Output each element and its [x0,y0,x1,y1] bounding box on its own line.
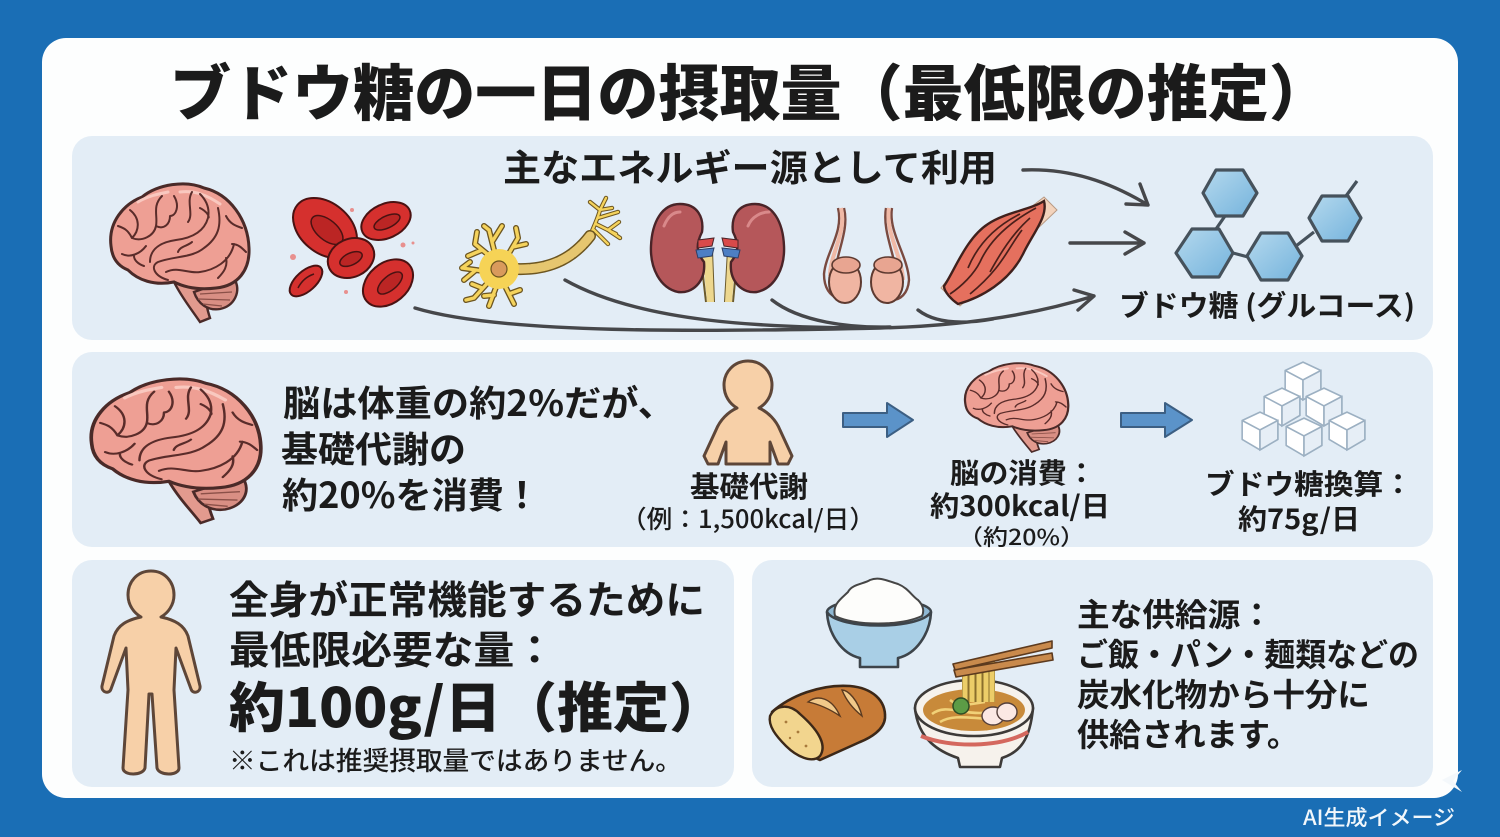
text: minimum need [229,570,725,778]
panel: food sources [752,560,1433,787]
icon: large brain [91,379,261,523]
text: brain consumption: 脳の消費： [950,452,1096,492]
arrow: label to glucose [1023,170,1148,205]
text: glucose conversion: 約75g/日 [1238,498,1360,538]
text: food sources: 主な供給源： [1077,590,1273,636]
text: minimum need: 最低限必要な量： [229,620,555,676]
text: basal metabolism [621,464,875,536]
icon: rice bowl [827,579,931,667]
icon: full body person [102,571,200,774]
text: brain share: 基礎代謝の [281,421,466,473]
icon: glucose molecule [1176,170,1361,280]
text: minimum need: 約100g/日（推定） [229,664,725,743]
text: brain share: 約20%を消費！ [282,467,540,519]
text: minimum need: 全身が正常機能するために [229,570,705,626]
icon: neuron [462,198,620,306]
icon: testes [824,208,909,303]
text: brain share: 脳は体重の約2%だが、 [283,375,675,427]
panel: minimum need [72,560,734,787]
text: food sources: 供給されます。 [1077,710,1299,756]
text: glucose conversion: ブドウ糖換算： [1205,463,1413,503]
arrow: blue 2 [1121,403,1192,437]
heading: main energy source: 主なエネルギー源として利用 [503,138,997,192]
watermark sparkle [1442,770,1462,792]
icon: muscle [941,197,1057,306]
text: basal metabolism: 基礎代謝 [690,464,808,506]
watermark: AI生成イメージ [1303,802,1455,832]
text: basal metabolism: （例：1,500kcal/日） [621,500,875,536]
arrow: organs to glucose [415,280,1094,330]
text: brain consumption: 約300kcal/日 [930,485,1110,525]
icon: ramen bowl [915,641,1053,767]
panel: energy use [72,136,1433,340]
text: brain consumption [930,452,1110,552]
icon: brain [111,184,249,322]
icon: red blood cells [281,186,422,316]
label: glucose: ブドウ糖 (グルコース) [1119,283,1415,325]
text: brain share [281,375,675,519]
icon: person bust [704,361,792,464]
arrow: muscle to glucose [1070,232,1144,254]
icon: sugar cubes [1242,362,1365,456]
text: minimum need: ※これは推奨摂取量ではありません。 [229,741,682,778]
arrows into glucose [415,170,1148,330]
icon: bread [770,686,885,760]
icon: kidneys [651,204,784,302]
text: glucose conversion [1205,463,1413,538]
panel: brain consumption [72,352,1433,552]
text: food sources: 炭水化物から十分に [1077,670,1370,716]
text: food sources [1077,590,1419,756]
arrow: blue 1 [843,403,913,437]
text: brain consumption: （約20%） [958,520,1085,552]
icon: brain small [965,363,1068,452]
title: ブドウ糖の一日の摂取量（最低限の推定） [170,44,1330,133]
neuron cell body [479,249,519,289]
text: food sources: ご飯・パン・麺類などの [1077,630,1419,676]
